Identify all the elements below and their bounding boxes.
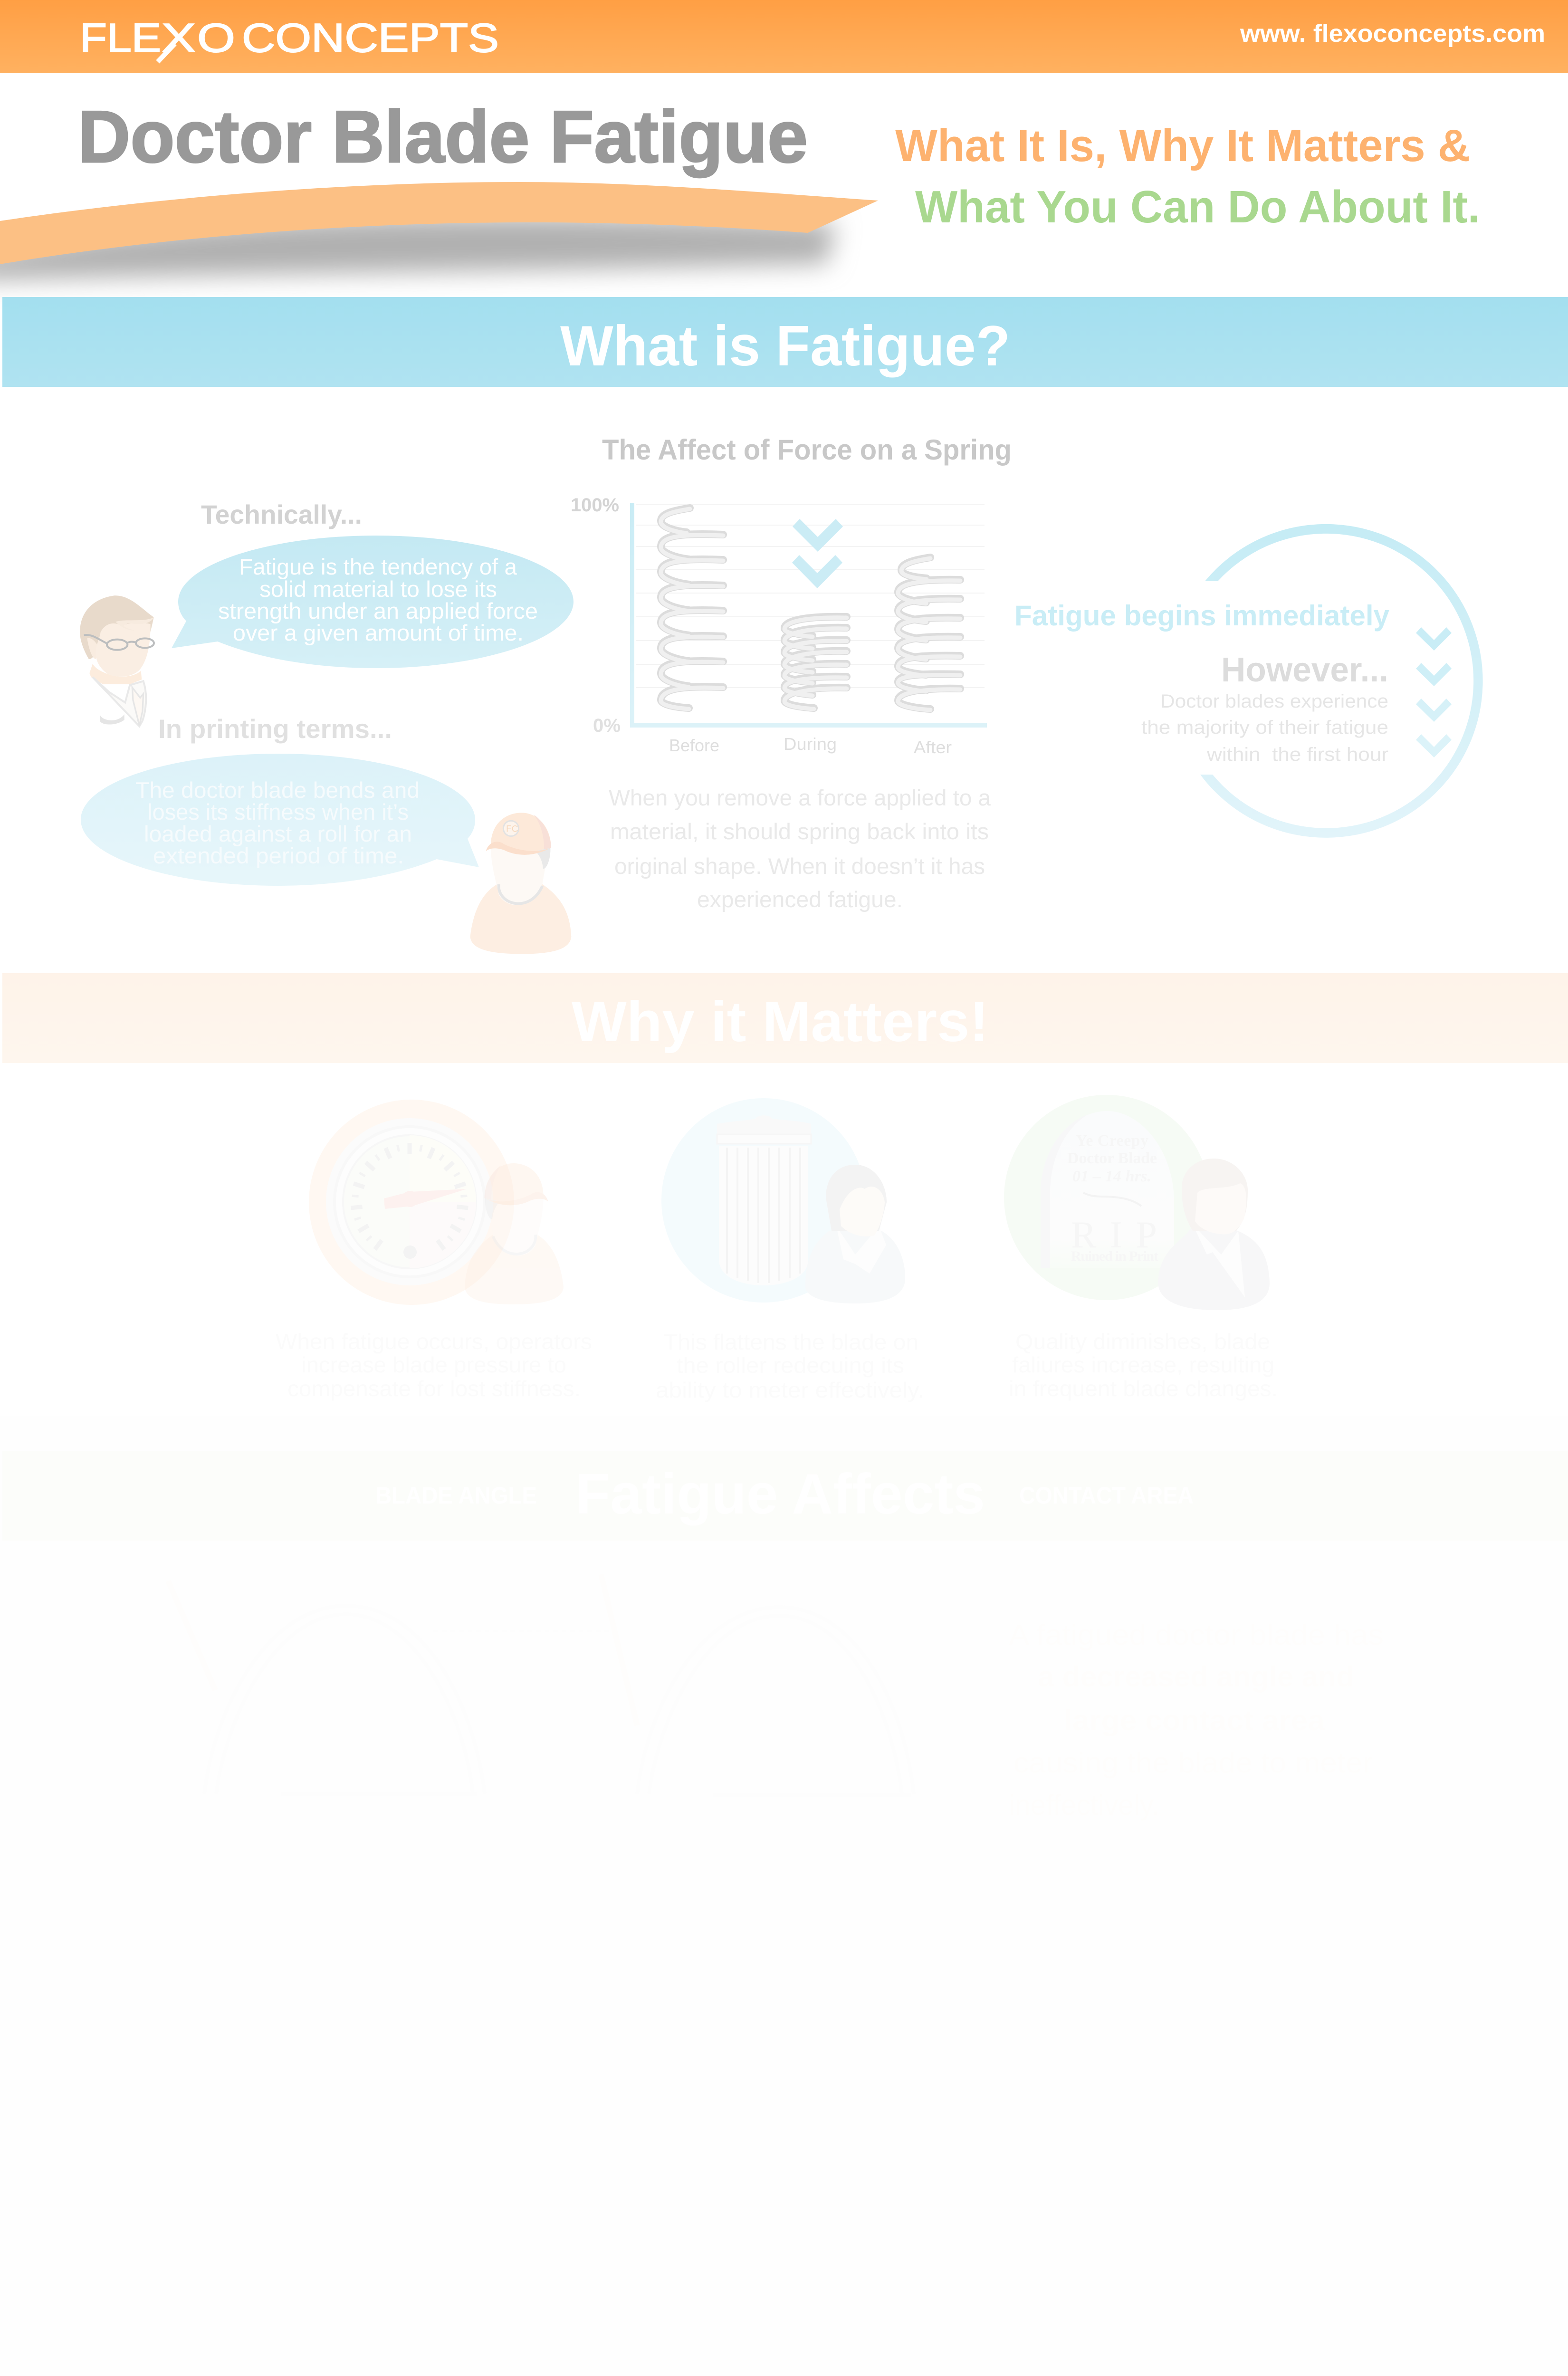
icon: gravestone: 01 – 14 hrs. — [1072, 1168, 1151, 1185]
chart gridlines — [636, 504, 985, 688]
speech bubble: technical definition — [172, 536, 574, 668]
icon: press operator with cap — [470, 813, 571, 954]
chart title: The Affect of Force on a Spring — [602, 434, 1012, 466]
text block: why it matters, pressure: increase blade pressure to — [301, 1352, 566, 1377]
text block: fatigued blade effects: ineffectively. — [1009, 1789, 1159, 1821]
text block: why it matters, pressure: compensate for lost stiffness. — [287, 1376, 581, 1401]
title: Doctor Blade Fatigue — [78, 96, 808, 178]
text block: why it matters, quality — [1009, 1329, 1278, 1401]
spring: after — [898, 557, 960, 710]
subtitle: What It Is, Why It Matters & — [895, 120, 1470, 171]
speech bubble: printing definition: loaded against a roll for an — [144, 821, 412, 846]
logo: Flexo Concepts: X — [162, 16, 196, 61]
spring chart — [571, 495, 987, 757]
text block: first hour note: Doctor blades experience — [1160, 691, 1388, 712]
subtitle: What You Can Do About It. — [915, 182, 1480, 232]
subtitle — [895, 120, 1480, 232]
label: contact area: CONTACT AREA — [1019, 1482, 1194, 1509]
icon: pressure gauge — [309, 1100, 514, 1305]
logo: Flexo Concepts: CONCEPTS — [242, 16, 499, 61]
logo: Flexo Concepts — [80, 16, 499, 62]
icon: operator beside gauge — [465, 1163, 564, 1304]
section band: Why it Matters: Why it Matters! — [572, 990, 989, 1054]
speech bubble: printing definition — [81, 754, 479, 886]
logo: Flexo Concepts: O — [197, 16, 235, 61]
diagram: new blade versus fatigued blade — [168, 1574, 914, 1795]
text block: fatigued blade effects — [1009, 1619, 1384, 1821]
icon: doctor with glasses — [80, 595, 154, 726]
text block: first hour note — [1141, 691, 1388, 765]
icon: gravestone: Ruined in Print — [1071, 1248, 1158, 1264]
spring: during — [784, 617, 847, 709]
section band: Why it Matters — [2, 973, 1568, 1063]
header bar — [0, 0, 1568, 73]
section band: What is Fatigue: What is Fatigue? — [560, 314, 1010, 378]
heading: Fatigue begins immediately: Fatigue begins immediately — [1014, 600, 1390, 632]
icon: manager with grey hair — [805, 1165, 905, 1303]
label: during: During — [784, 734, 837, 754]
speech bubble: technical definition: solid material to lose its — [259, 576, 497, 602]
text block: fatigued blade effects: large contact area — [1064, 1705, 1325, 1736]
text block: spring explanation: experienced fatigue. — [697, 887, 903, 912]
speech bubble: printing definition: extended period of time. — [153, 843, 404, 868]
label: blade angle: BLADE ANGLE — [375, 1482, 537, 1509]
speech bubble: technical definition: Fatigue is the tendency of a — [239, 554, 517, 579]
axis label: 0 percent: 0% — [593, 715, 621, 736]
icon: gravestone — [1004, 1095, 1209, 1300]
icon: trash can — [661, 1098, 866, 1303]
icon: gravestone: Ye Creepy — [1076, 1132, 1148, 1150]
icon: four down chevrons — [1416, 627, 1452, 757]
text block: why it matters, metering: the roller redecuing its — [677, 1353, 904, 1378]
text block: why it matters, metering: ability to meter effectively. — [656, 1378, 924, 1402]
label: before: Before — [669, 736, 719, 755]
text block: why it matters, quality: Quality diminishes, blade — [1015, 1329, 1270, 1354]
text block: why it matters, metering: This flattens the blade on — [664, 1330, 918, 1354]
ring around fatigue note — [1200, 524, 1483, 838]
speech bubble: technical definition: over a given amount of time. — [233, 620, 524, 645]
text block: why it matters, metering — [656, 1330, 924, 1402]
text block: spring explanation: material, it should spring back into its — [610, 819, 989, 844]
band heading: Fatigue Affects — [575, 1462, 985, 1526]
section band: Fatigue Affects — [2, 1451, 1568, 1541]
heading: In printing terms: In printing terms... — [158, 714, 392, 744]
text block: first hour note: the majority of their fatigue — [1141, 717, 1388, 738]
heading: However: However... — [1221, 651, 1388, 689]
icon: businessman in suit — [1158, 1159, 1270, 1310]
text block: fatigued blade effects: causing the blade to meter — [1013, 1747, 1373, 1779]
text block: fatigued blade effects: a decreased angle and — [1038, 1661, 1354, 1693]
page background — [0, 1416, 1568, 2376]
website url: www. flexoconcepts.com — [1240, 20, 1545, 48]
axis label: 100 percent: 100% — [571, 495, 619, 516]
logo: Flexo Concepts: FLE — [80, 16, 161, 61]
label: after: After — [914, 738, 952, 757]
text block: why it matters, pressure — [276, 1329, 592, 1401]
speech bubble: technical definition: strength under an applied force — [218, 598, 538, 623]
heading: Technically: Technically... — [201, 499, 362, 529]
text block: spring explanation: When you remove a force applied to a — [609, 785, 991, 810]
spring: before — [661, 508, 723, 709]
text block: why it matters, pressure: When fatigue occurs, operators — [276, 1329, 592, 1354]
text block: first hour note: within the first hour — [1206, 744, 1388, 765]
text block: spring explanation: original shape. When it doesn’t it has — [614, 853, 985, 879]
text block: spring explanation — [609, 785, 991, 912]
text block: why it matters, quality: in frequent blade changes. — [1009, 1376, 1278, 1401]
icon: gravestone: RIP — [1071, 1214, 1157, 1256]
section band: What is Fatigue — [2, 297, 1568, 387]
speech bubble: printing definition: loses its stiffness when it’s — [147, 799, 409, 824]
speech bubble: printing definition: The doctor blade bends and — [135, 777, 420, 803]
text block: why it matters, quality: faliures increase, resulting — [1012, 1352, 1274, 1377]
text block: fatigued blade effects: A fatigued doctor blade has — [1009, 1619, 1384, 1651]
chart axes — [630, 503, 987, 728]
arrow: downward force chevrons — [792, 519, 843, 588]
icon: gravestone: Doctor Blade — [1067, 1150, 1157, 1167]
swoosh with shadow — [0, 182, 878, 280]
icon: press operator with cap: FC — [506, 824, 518, 834]
